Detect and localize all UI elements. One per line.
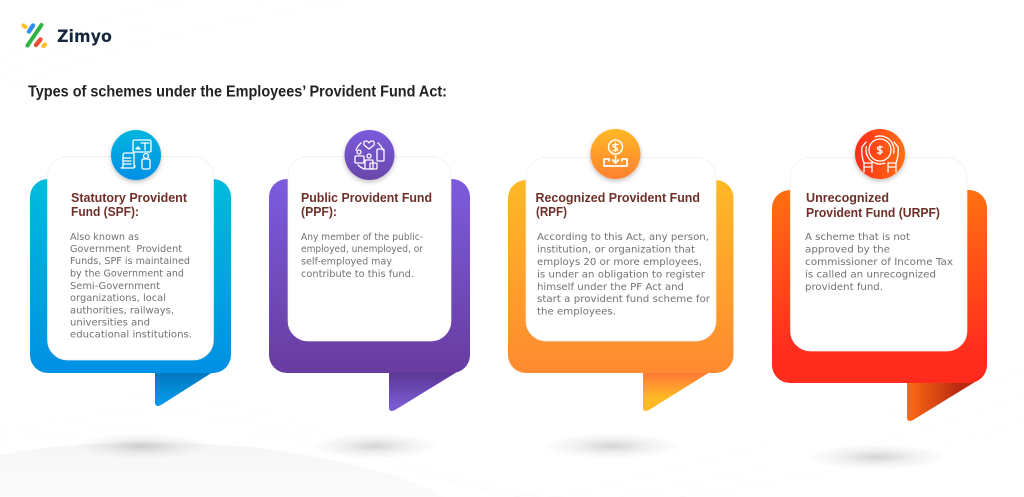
heading: Recognized Provident Fund (536, 191, 700, 205)
white card (526, 158, 716, 341)
panel: Public Provident Fund (269, 130, 470, 459)
body text: self-employed may (301, 256, 392, 268)
body text: Semi-Government (70, 281, 160, 292)
heading: (PPF): (301, 205, 337, 219)
body text: by the Government and (70, 268, 184, 280)
panel: Statutory Provident Fund (30, 130, 231, 459)
panel: Recognized Provident Fund (508, 129, 734, 459)
speech bubble tail (155, 372, 213, 406)
body text: employs 20 or more employees, (537, 257, 702, 268)
body text: universities and (70, 318, 150, 328)
title: Types of schemes under the Employees’ Provident Fund Act: (28, 84, 447, 100)
speech bubble body (772, 190, 987, 383)
speech bubble body (269, 179, 470, 373)
heading (806, 191, 940, 220)
body text (537, 232, 710, 318)
body text: the employees. (537, 306, 616, 318)
white card (288, 156, 451, 341)
ground shadow (542, 433, 682, 459)
icon: documents and officer (111, 130, 161, 180)
speech bubble tail (643, 372, 710, 411)
body text (805, 232, 953, 293)
body text: educational institutions. (70, 330, 192, 340)
body text: Government Provident (70, 244, 182, 255)
logo wordmark: Zimyo (57, 27, 112, 47)
body text: start a provident fund scheme for (537, 294, 710, 305)
heading: Public Provident Fund (301, 191, 432, 205)
body text: is called an unrecognized (805, 270, 936, 280)
body text (70, 232, 192, 340)
body text: Funds, SPF is maintained (70, 256, 190, 267)
speech bubble body (508, 180, 734, 373)
heading: Statutory Provident (71, 191, 188, 205)
speech bubble tail (907, 382, 975, 421)
logo: Zimyo (24, 25, 112, 47)
logo mark (24, 25, 45, 46)
heading (536, 191, 700, 219)
heading (71, 191, 188, 219)
heading: Unrecognized (806, 191, 889, 205)
body text: According to this Act, any person, (537, 232, 709, 243)
body text: employed, unemployed, or (301, 244, 423, 255)
icon: hands holding coin (855, 129, 905, 179)
white card (48, 156, 214, 360)
body text: A scheme that is not (805, 232, 910, 243)
body text: authorities, railways, (70, 306, 174, 316)
heading: Fund (SPF): (71, 205, 139, 219)
ground shadow (807, 444, 947, 470)
speech bubble body (30, 179, 231, 373)
body text: approved by the (805, 244, 890, 256)
heading: Provident Fund (URPF) (806, 206, 940, 220)
heading: (RPF) (536, 205, 567, 219)
body text: commissioner of Income Tax (805, 257, 953, 268)
panel: Unrecognized Provident Fund (772, 129, 987, 470)
body text: institution, or organization that (537, 244, 695, 256)
ground shadow (74, 433, 210, 459)
body text: Also known as (70, 232, 139, 243)
body text: Any member of the public- (301, 232, 423, 243)
white card (790, 158, 967, 351)
speech bubble tail (389, 372, 457, 411)
body text: is under an obligation to register (537, 270, 705, 280)
icon: community (344, 130, 394, 180)
body text (301, 232, 423, 280)
icon: coin deposit (590, 129, 640, 179)
body text: provident fund. (805, 282, 883, 293)
body text: organizations, local (70, 293, 166, 304)
heading (301, 191, 432, 219)
body text: himself under the PF Act and (537, 282, 684, 293)
body text: contribute to this fund. (301, 269, 414, 280)
ground shadow (311, 433, 439, 459)
